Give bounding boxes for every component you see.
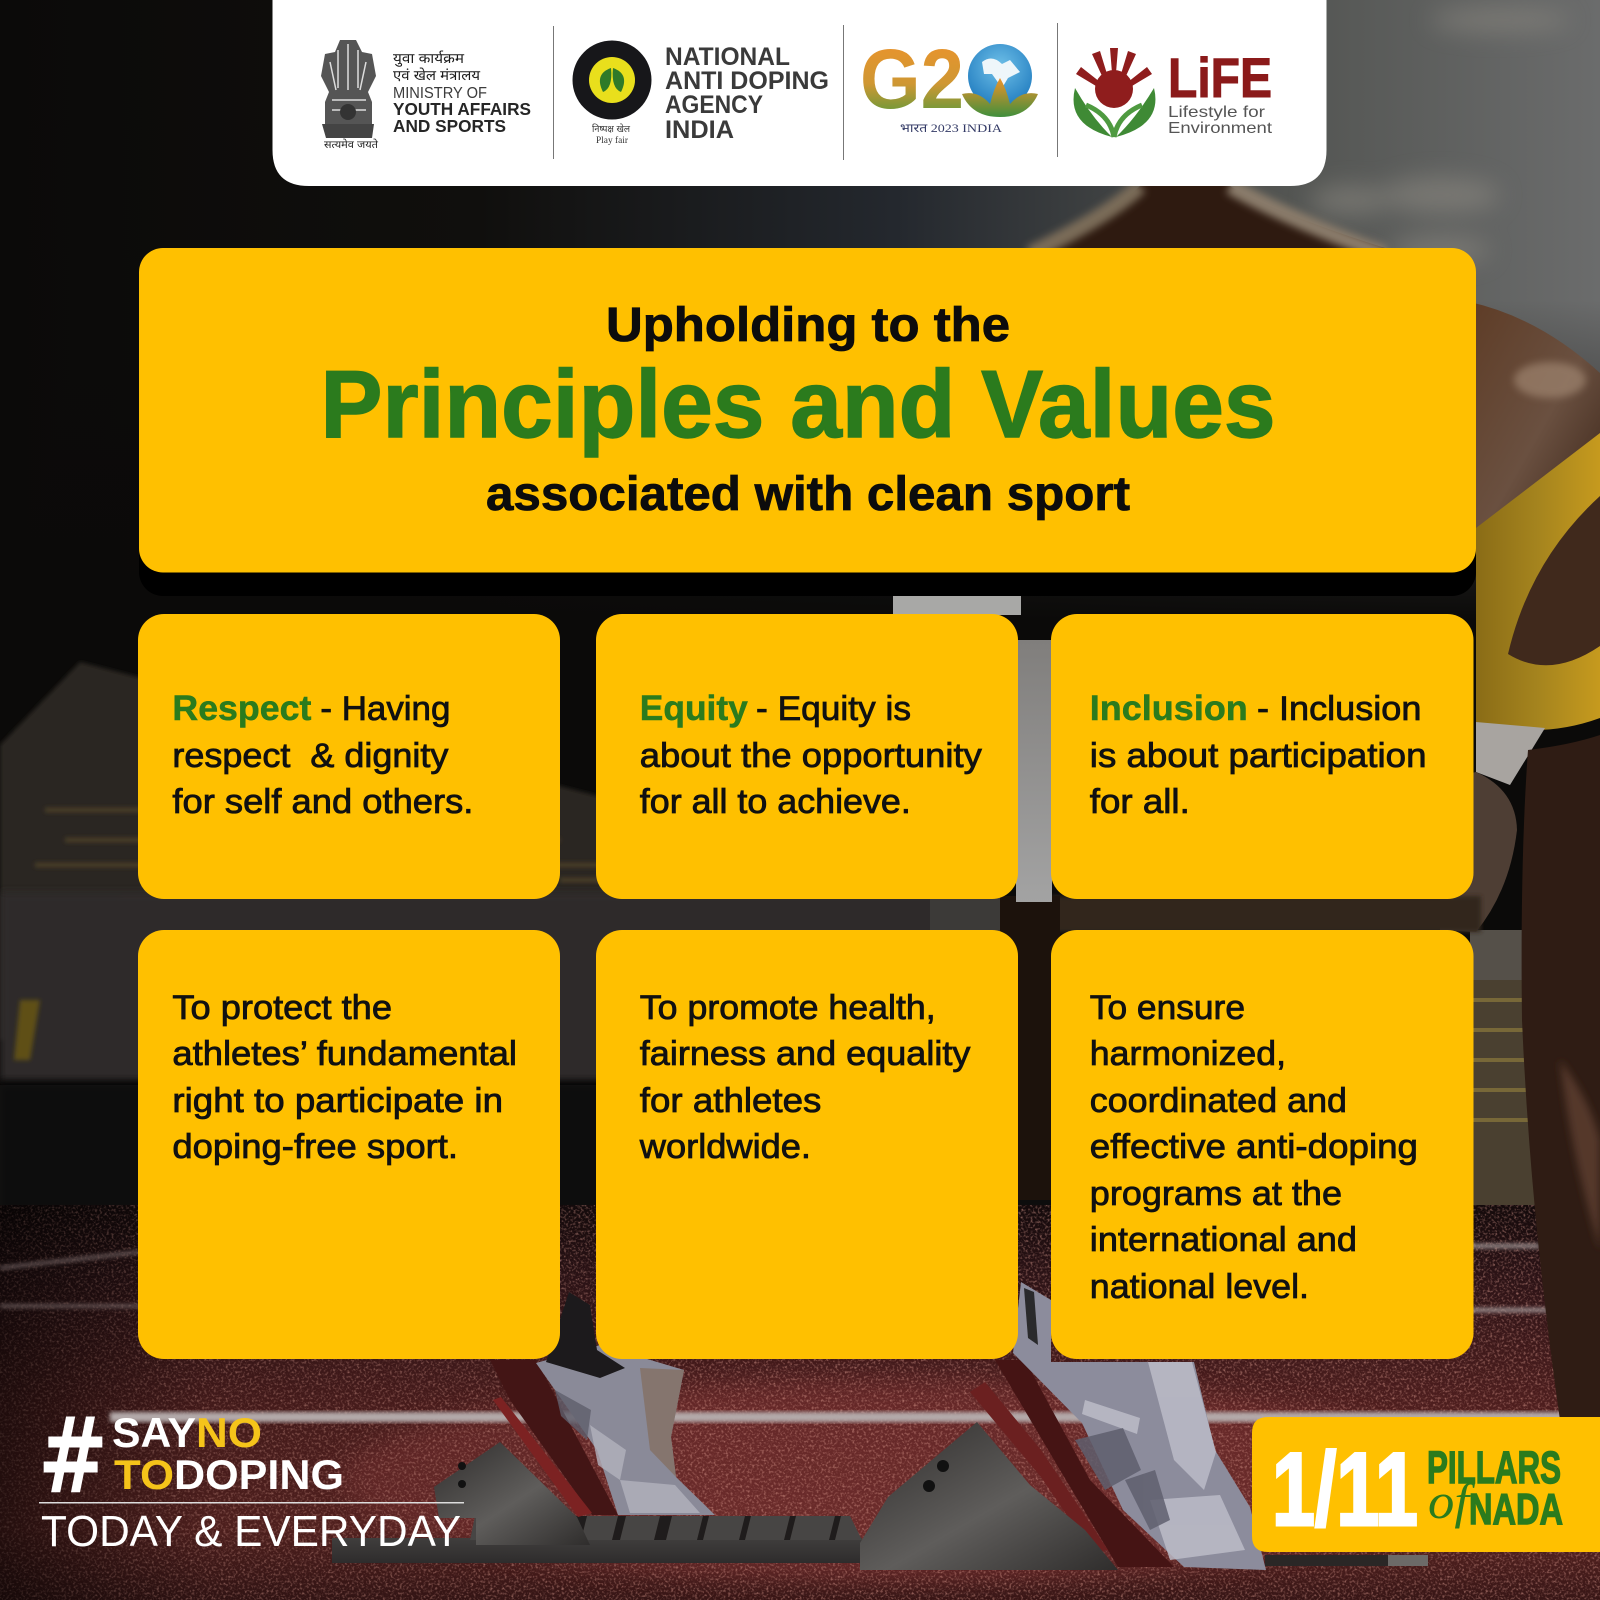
sky with clouds — [0, 0, 1600, 620]
logo: National Anti Doping Agency India: AGENCY — [665, 91, 763, 119]
left shoe — [490, 1292, 715, 1515]
panel: harmonized programs — [1051, 930, 1474, 1359]
term: Respect: Respect — [172, 689, 312, 728]
logo: LiFE Lifestyle for Environment: Environment — [1168, 120, 1273, 137]
text block: right to participate in — [172, 1082, 503, 1120]
text block — [639, 989, 970, 1166]
right shoe — [995, 1282, 1428, 1570]
logo: National Anti Doping Agency India: Play fair — [596, 135, 629, 146]
icon: national emblem — [321, 40, 379, 151]
logo: G20 India 2023 — [860, 32, 1038, 135]
hashtag: Say No To Doping: TODAY & EVERYDAY — [41, 1507, 461, 1556]
text block: programs at the — [1090, 1175, 1342, 1213]
icon: national emblem: सत्यमेव जयते — [324, 138, 379, 151]
text block: harmonized, — [1090, 1035, 1286, 1073]
logo: Ministry of Youth Affairs and Sports: एवं खेल मंत्रालय — [393, 67, 481, 83]
text block: for athletes — [640, 1082, 821, 1120]
stands right — [1470, 930, 1540, 1210]
heading line 3: associated with clean sport — [486, 468, 1130, 521]
term: Inclusion: Inclusion — [1090, 689, 1248, 728]
icon: lotus — [962, 78, 1038, 117]
logo: LiFE Lifestyle for Environment: Lifestyle for — [1168, 104, 1266, 121]
text block — [172, 989, 517, 1166]
grandstand left — [0, 662, 1600, 1210]
logo: G20 India 2023: भारत 2023 INDIA — [900, 121, 1002, 135]
hashtag: Say No To Doping: NO — [196, 1409, 262, 1456]
heading: main title: Principles and Values — [320, 351, 1276, 458]
text block: To ensure — [1090, 989, 1245, 1027]
text block: doping-free sport. — [172, 1128, 458, 1166]
panel: protect athletes — [138, 930, 560, 1359]
panel: title banner — [139, 248, 1476, 596]
definition: Respect: for self and others. — [172, 783, 473, 821]
badge: 1/11 Pillars of NADA: NADA — [1469, 1485, 1563, 1534]
text block: fairness and equality — [640, 1035, 970, 1073]
definition: Respect: respect & dignity — [172, 737, 448, 775]
logo: National Anti Doping Agency India: ANTI DOPING — [665, 67, 829, 95]
right starting block — [860, 1382, 1118, 1570]
hashtag: Say No To Doping — [38, 1395, 464, 1556]
text block — [1090, 989, 1418, 1306]
logo: Ministry of Youth Affairs and Sports — [321, 40, 531, 151]
text block: national level. — [1090, 1268, 1309, 1306]
logo: Ministry of Youth Affairs and Sports: YOUTH AFFAIRS — [393, 99, 531, 119]
athlete shorts — [893, 596, 1052, 932]
term: Equity: Equity — [640, 689, 748, 728]
logo: Ministry of Youth Affairs and Sports: युवा कार्यक्रम — [393, 50, 465, 67]
definition: Equity: for all to achieve. — [640, 783, 911, 821]
logo: LiFE Lifestyle for Environment: LiFE — [1168, 46, 1272, 109]
definition: Equity: about the opportunity — [640, 737, 982, 775]
text block: international and — [1090, 1221, 1357, 1259]
athlete torso and legs — [1000, 186, 1600, 1420]
badge: 1/11 Pillars of NADA: 1/11 — [1272, 1432, 1418, 1548]
text block: effective anti-doping — [1090, 1128, 1418, 1166]
icon: sun and leaves — [1074, 48, 1155, 137]
definition: Respect — [172, 690, 473, 821]
panel: logo header — [272, 0, 1326, 186]
left starting block — [434, 1397, 592, 1545]
icon: NADA seal — [572, 40, 652, 120]
logo: National Anti Doping Agency India — [572, 40, 829, 146]
definition: Respect: - Having — [320, 690, 450, 728]
icon: globe — [968, 44, 1032, 108]
logo: LiFE Lifestyle for Environment — [1074, 46, 1273, 137]
panel: Equity — [596, 614, 1018, 899]
logo: Ministry of Youth Affairs and Sports: AND SPORTS — [393, 116, 506, 136]
panel: Respect — [138, 614, 560, 899]
definition: Inclusion: - Inclusion — [1257, 690, 1421, 728]
definition: Equity — [640, 690, 982, 821]
logo: National Anti Doping Agency India: INDIA — [665, 116, 734, 144]
definition: Inclusion — [1090, 690, 1426, 821]
text block: To protect the — [172, 989, 392, 1027]
badge: 1/11 Pillars of NADA — [1252, 1417, 1600, 1552]
hashtag: Say No To Doping: # — [38, 1395, 108, 1517]
panel: Inclusion — [1051, 614, 1474, 899]
text block: To promote health, — [640, 989, 936, 1027]
text block: athletes’ fundamental — [172, 1035, 517, 1073]
hashtag: Say No To Doping: DOPING — [174, 1451, 344, 1498]
definition: Inclusion: for all. — [1090, 783, 1190, 821]
running track — [0, 1205, 1600, 1600]
starting block bar and teeth — [332, 1516, 862, 1563]
definition: Inclusion: is about participation — [1090, 737, 1426, 775]
logo: National Anti Doping Agency India: निष्पक्ष खेल — [592, 123, 631, 135]
text block: worldwide. — [639, 1128, 811, 1166]
panel: promote health — [596, 930, 1018, 1359]
logo: Ministry of Youth Affairs and Sports: MINISTRY OF — [393, 85, 487, 102]
hashtag: Say No To Doping: TO — [114, 1451, 174, 1498]
text block: coordinated and — [1090, 1082, 1347, 1120]
hashtag: Say No To Doping: SAY — [112, 1409, 196, 1456]
logo: G20 India 2023: G2 — [860, 32, 964, 126]
definition: Equity: - Equity is — [756, 690, 911, 728]
heading line 1: Upholding to the — [606, 299, 1010, 352]
logo: National Anti Doping Agency India: NATIONAL — [665, 43, 790, 71]
badge: 1/11 Pillars of NADA: of — [1428, 1473, 1475, 1529]
